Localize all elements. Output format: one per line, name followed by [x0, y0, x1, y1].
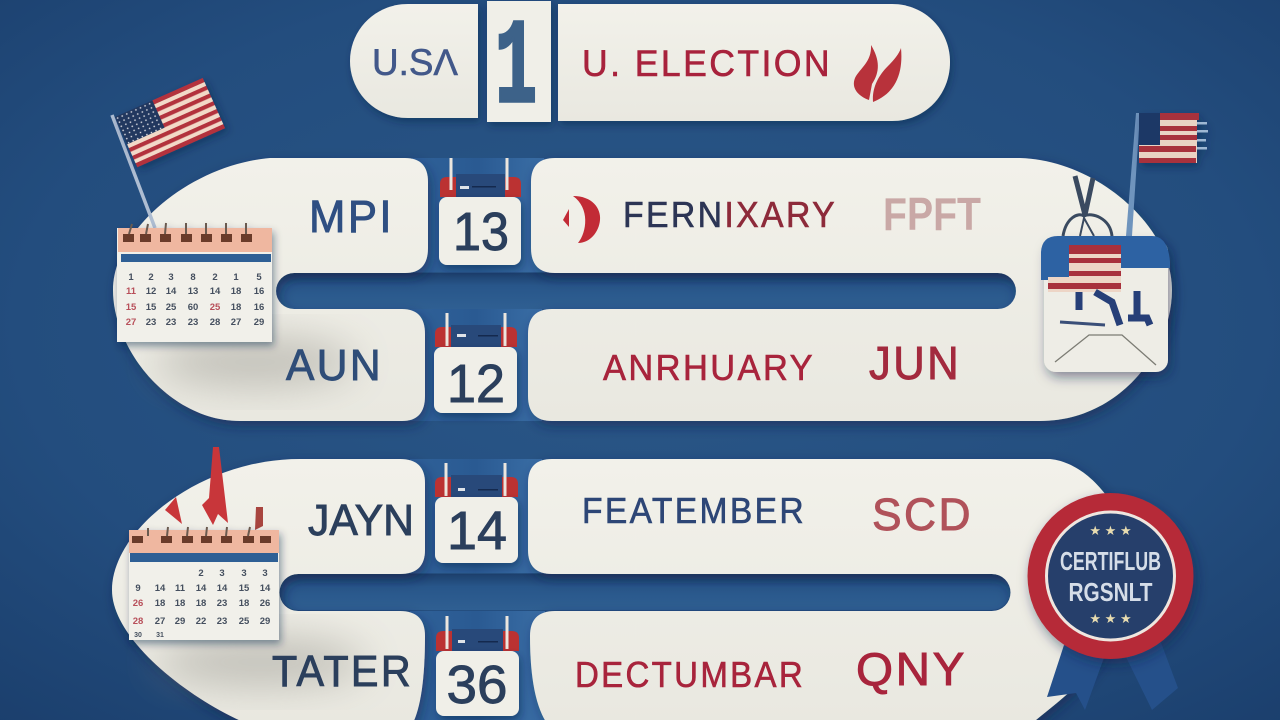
- header segment: U. ELECTION: [558, 4, 950, 121]
- calendar tile: 13: [439, 158, 521, 265]
- calendar: upper left: 25: [210, 302, 221, 313]
- calendar tile: 36: 36: [446, 655, 508, 715]
- calendar: lower left: [129, 527, 279, 640]
- calendar: lower left: 28: [133, 616, 143, 627]
- calendar: lower left: 14: [217, 583, 228, 594]
- calendar tile: 14: [435, 463, 518, 563]
- calendar: upper left: 2: [212, 272, 218, 283]
- badge: certified result: [1028, 493, 1194, 710]
- label: DECTUMBAR: DECTUMBAR: [575, 654, 805, 695]
- calendar tile: 12: [434, 313, 517, 414]
- left white shape: [112, 459, 425, 720]
- ribbons: [1047, 640, 1178, 710]
- header tile: number 1: 1: [495, 2, 537, 138]
- calendar: upper left: 2: [148, 272, 154, 283]
- header segment: U. ELECTION: U. ELECTION: [582, 43, 832, 84]
- calendar: upper left: 14: [166, 286, 177, 297]
- calendar: upper left: 16: [254, 286, 264, 297]
- calendar: lower left: 31: [156, 632, 164, 639]
- calendar: upper left: 25: [166, 302, 177, 313]
- calendar: upper left: 11: [126, 286, 137, 297]
- calendar tile: 13: 13: [453, 202, 509, 262]
- icon: red crescent: [563, 196, 600, 243]
- calendar: upper left: 18: [231, 302, 241, 313]
- calendar: lower left: 3: [262, 568, 268, 579]
- label: SCD: SCD: [872, 489, 973, 540]
- label: QNY: QNY: [856, 643, 967, 695]
- calendar: upper left: [117, 223, 272, 342]
- calendar: lower left: 29: [260, 616, 270, 627]
- calendar: upper left: 1: [233, 272, 239, 283]
- calendar: lower left: 3: [241, 568, 247, 579]
- calendar: lower left: 23: [217, 616, 227, 627]
- calendar: upper left: 1: [128, 272, 134, 283]
- date column: [410, 459, 545, 720]
- calendar tile: 12: 12: [447, 354, 505, 414]
- box lid: [1041, 236, 1170, 280]
- calendar tile: 14: 14: [447, 501, 507, 561]
- label: ANRHUARY: ANRHUARY: [603, 347, 815, 388]
- calendar: lower left: 29: [175, 616, 185, 627]
- calendar: lower left: 23: [217, 598, 227, 609]
- calendar: lower left: 9: [135, 583, 141, 594]
- calendar: upper left: 14: [210, 286, 221, 297]
- connector slot: [276, 273, 1016, 309]
- calendar: upper left: 27: [126, 317, 136, 328]
- label: JUN: JUN: [869, 337, 961, 389]
- badge text line 1: CERTIFLUB: [1060, 546, 1161, 576]
- badge text line 2: RGSNLT: [1068, 577, 1153, 607]
- calendar: upper left: 8: [190, 272, 196, 283]
- label: FERNIXARY: FERNIXARY: [623, 194, 837, 235]
- box body: [1044, 240, 1168, 372]
- left white shape: [113, 158, 428, 421]
- calendar tile: 36: [436, 616, 519, 716]
- header bar: [350, 1, 950, 138]
- label: AUN: AUN: [286, 341, 383, 390]
- calendar: lower left: 15: [239, 583, 250, 594]
- calendar: lower left: 14: [260, 583, 271, 594]
- calendar: lower left: 18: [155, 598, 165, 609]
- calendar: lower left: 2: [198, 568, 204, 579]
- calendar: lower left: 22: [196, 616, 206, 627]
- calendar: lower left: 3: [219, 568, 225, 579]
- label: JAYN: JAYN: [308, 496, 414, 545]
- calendar: lower left: 18: [175, 598, 185, 609]
- calendar: upper left: 28: [210, 317, 220, 328]
- calendar: upper left: 13: [188, 286, 198, 297]
- badge stars top: ★ ★ ★: [1089, 523, 1132, 538]
- calendar: lower left: 14: [155, 583, 166, 594]
- calendar: upper left: 23: [146, 317, 156, 328]
- date column: [410, 158, 544, 421]
- envelope flap: [1055, 335, 1156, 365]
- calendar: lower left: 18: [196, 598, 206, 609]
- calendar: upper left: 3: [168, 272, 174, 283]
- calendar: upper left: 16: [254, 302, 264, 313]
- calendar: lower left: 27: [155, 616, 165, 627]
- calendar: upper left: 15: [146, 302, 157, 313]
- label: TATER: TATER: [272, 647, 413, 696]
- scissors-shaped handle: [1063, 176, 1112, 236]
- calendar: upper left: 12: [146, 286, 156, 297]
- label: FPFT: FPFT: [883, 188, 981, 240]
- right white shape: [528, 158, 1172, 421]
- calendar: upper left: 60: [188, 302, 198, 313]
- lid flag: [1048, 245, 1121, 292]
- soft shade under calendar: [155, 638, 365, 686]
- right white shape: [528, 459, 1125, 720]
- calendar: lower left: 18: [239, 598, 249, 609]
- calendar: upper left: 23: [166, 317, 176, 328]
- connector slot: [280, 574, 1010, 610]
- calendar: lower left: 30: [134, 632, 142, 639]
- header segment: U.SA: [350, 4, 478, 118]
- red flags on lower calendar: [165, 447, 263, 530]
- panel: upper timeline: [113, 158, 1172, 421]
- panel: lower timeline: [112, 459, 1125, 720]
- calendar: lower left: 14: [196, 583, 207, 594]
- calendar: lower left: 25: [239, 616, 250, 627]
- calendar: lower left: 11: [175, 583, 186, 594]
- calendar: upper left: 18: [231, 286, 241, 297]
- header segment: U.SA: U.SΛ: [372, 42, 458, 83]
- soft shade under calendar: [155, 338, 355, 386]
- calendar: upper left: 23: [188, 317, 198, 328]
- box emblem: [1079, 291, 1150, 325]
- calendar: upper left: 5: [256, 272, 262, 283]
- calendar: lower left: 26: [133, 598, 143, 609]
- icon: American flag on pole, upper right: [1126, 113, 1208, 236]
- icon: ballot box: [1041, 176, 1170, 372]
- box mark: [1060, 322, 1105, 325]
- icon: red leaves: [854, 45, 901, 102]
- header tile: number 1: [487, 1, 551, 138]
- calendar: upper left: 27: [231, 317, 241, 328]
- calendar: upper left: 15: [126, 302, 137, 313]
- calendar: upper left: 29: [254, 317, 264, 328]
- label: FEATEMBER: FEATEMBER: [582, 490, 806, 531]
- icon: American flag, upper left: [112, 78, 225, 228]
- label: MPI: MPI: [309, 191, 394, 242]
- calendar: lower left: 26: [260, 598, 270, 609]
- badge stars bottom: ★ ★ ★: [1089, 611, 1132, 626]
